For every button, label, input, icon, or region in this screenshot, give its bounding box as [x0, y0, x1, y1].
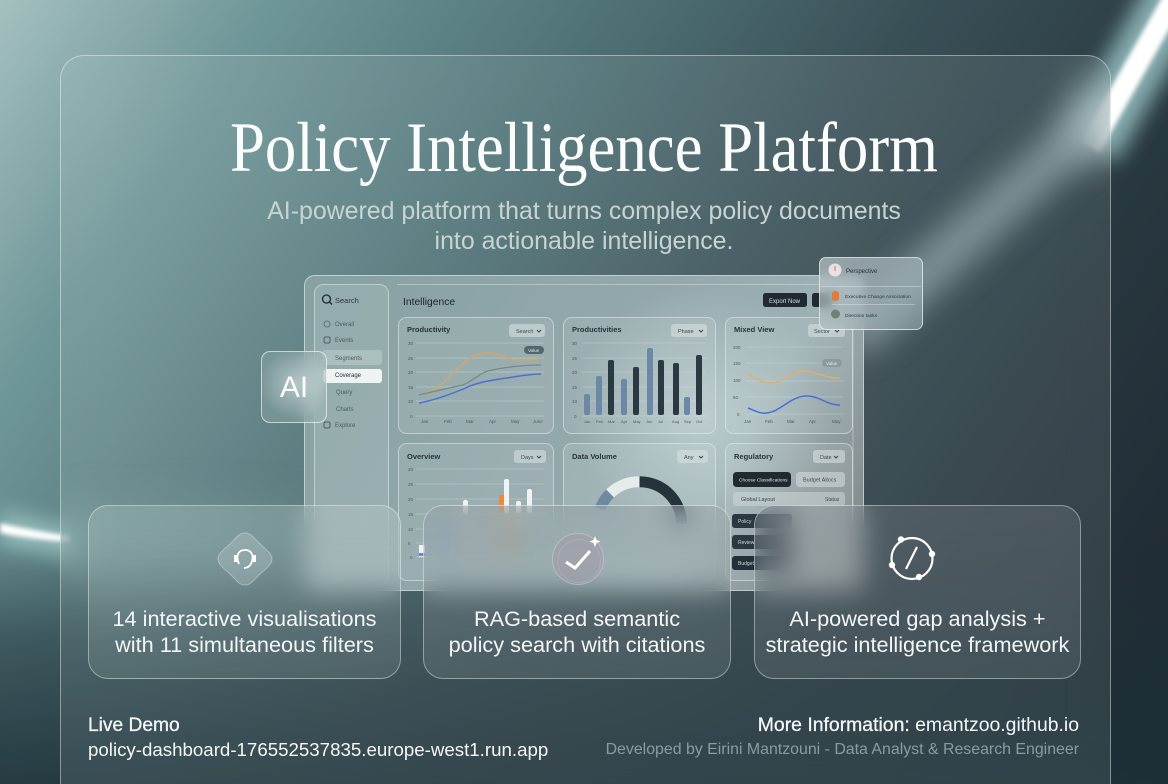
line chart card: productivity: 25	[408, 356, 414, 361]
line chart card: productivity: Search	[516, 329, 533, 335]
footer: live demo: Live Demo	[88, 714, 180, 736]
line chart card: mixed view: Value	[826, 361, 838, 366]
bar chart card: productivity bars: 15	[572, 385, 578, 390]
feature text: with 11 simultaneous filters	[115, 632, 374, 657]
dashboard sidebar: Explore	[335, 423, 356, 429]
line chart card: productivity: Productivity	[407, 325, 451, 334]
line chart card: productivity: Feb	[444, 419, 452, 424]
AI floating tile: AI	[280, 371, 308, 404]
icon: headset diamond	[218, 532, 272, 586]
bar chart card: productivity bars: 20	[572, 370, 578, 375]
controls card: Status	[825, 497, 840, 503]
line chart card: productivity	[398, 318, 554, 434]
bar chart card: overview: Overview	[407, 452, 441, 461]
footer: developer credit: Developed by Eirini Mantzouni - Data Analyst & Research Engineer	[606, 741, 1079, 758]
bar chart card: overview: 10	[408, 527, 414, 532]
bar chart card: productivity bars: May	[633, 419, 641, 424]
feature text: AI-powered gap analysis +	[789, 606, 1046, 631]
dashboard sidebar	[314, 284, 388, 584]
controls card: Budget	[738, 561, 754, 567]
line chart card: mixed view: May	[832, 419, 841, 424]
bar chart card: productivity bars: Jun	[646, 419, 652, 424]
bar chart card: overview	[398, 444, 554, 580]
donut chart card	[564, 444, 716, 580]
bar chart card: productivity bars: Oct	[696, 419, 703, 424]
AI floating tile	[261, 351, 327, 423]
dashboard sidebar: Charts	[336, 407, 354, 413]
controls card	[726, 444, 852, 580]
line chart card: mixed view: Feb	[765, 419, 773, 424]
bar chart card: overview: 0	[410, 555, 413, 560]
line chart card: productivity: Apr	[489, 419, 497, 424]
feature card: gap analysis	[754, 505, 1081, 679]
line chart card: mixed view	[726, 318, 852, 434]
dashboard sidebar: Search	[335, 296, 359, 305]
bar chart card: productivity bars: 10	[572, 399, 578, 404]
bar chart card: productivity bars: Productivities	[572, 325, 622, 334]
line chart card: mixed view: Sector	[814, 329, 830, 335]
feature card: semantic search	[423, 505, 731, 679]
floating notification popup: Executive Change Association	[845, 294, 911, 300]
bar chart card: overview: 30	[408, 467, 414, 472]
donut chart card: Data Volume	[572, 452, 617, 461]
controls card: Global Layout	[741, 497, 775, 503]
line chart card: mixed view: Mar	[787, 419, 795, 424]
dashboard sidebar: Query	[336, 390, 352, 396]
feature text	[766, 606, 1070, 657]
subtitle	[267, 196, 901, 254]
dashboard sidebar: Coverage	[335, 373, 362, 379]
bar chart card: productivity bars: Aug	[672, 419, 679, 424]
line chart card: mixed view: Jan	[744, 419, 752, 424]
line chart card: productivity: 20	[408, 370, 414, 375]
line chart card: productivity: June	[533, 419, 543, 424]
feature text: strategic intelligence framework	[766, 632, 1069, 657]
bar chart card: overview: 20	[408, 497, 414, 502]
bar chart card: productivity bars: Sep	[684, 419, 692, 424]
bar chart card: productivity bars: 0	[574, 414, 577, 419]
bar chart card: productivity bars: 25	[572, 356, 578, 361]
subtitle: AI-powered platform that turns complex policy documents	[267, 196, 901, 224]
bar chart card: productivity bars: Jan	[584, 419, 590, 424]
line chart card: productivity: Value	[528, 348, 540, 353]
icon: check badge	[552, 533, 604, 585]
dashboard sidebar: Events	[335, 338, 353, 344]
bar chart card: productivity bars: Apr	[621, 419, 628, 424]
feature card: visualisations	[88, 505, 401, 679]
bar chart card: productivity bars: Jul	[658, 419, 663, 424]
feature text: policy search with citations	[449, 632, 705, 657]
bar chart card: productivity bars: Mar	[608, 419, 616, 424]
bar chart card: productivity bars	[564, 318, 716, 434]
line chart card: mixed view: Mixed View	[734, 325, 774, 334]
dashboard heading: Intelligence	[403, 297, 455, 308]
footer: live demo: policy-dashboard-176552537835.europe-west1.run.app	[88, 739, 548, 760]
line chart card: mixed view: 50	[733, 395, 739, 400]
icon: circular gap analysis	[888, 536, 936, 580]
panel diagonal glow	[70, 79, 1109, 582]
controls card: Budget Allocs	[803, 478, 837, 484]
controls card: Review	[738, 540, 755, 546]
bar chart card: productivity bars: Phase	[678, 329, 694, 335]
line chart card: mixed view: 0	[737, 412, 740, 417]
dashboard action buttons	[763, 293, 832, 307]
line chart card: productivity: May	[511, 419, 520, 424]
controls card: Regulatory	[734, 452, 774, 461]
dashboard action buttons: Export Now	[769, 299, 801, 305]
line chart card: mixed view: 200	[733, 345, 741, 350]
floating notification popup: Perspective	[846, 269, 878, 275]
line chart card: mixed view: 150	[733, 361, 741, 366]
feature text	[449, 606, 705, 657]
bar chart card: overview: Days	[521, 455, 534, 461]
footer: live demo	[88, 714, 548, 760]
dashboard sidebar: Overall	[335, 322, 354, 328]
dashboard sidebar: Segments	[335, 356, 362, 362]
footer: more information: More Information: emantzoo.github.io	[758, 714, 1079, 736]
donut chart card: Any	[684, 455, 694, 461]
feature text: 14 interactive visualisations	[112, 606, 376, 631]
floating notification popup	[819, 257, 923, 330]
bar chart card: productivity bars: Feb	[596, 419, 604, 424]
line chart card: mixed view: 100	[733, 378, 741, 383]
controls card: Date	[820, 455, 832, 461]
bar chart card: overview: 15	[408, 512, 414, 517]
line chart card: productivity: 10	[408, 399, 414, 404]
controls card: Choose Classifications	[739, 478, 788, 484]
feature text: RAG-based semantic	[474, 606, 680, 631]
line chart card: productivity: Mar	[466, 419, 474, 424]
line chart card: productivity: Jan	[421, 419, 429, 424]
line chart card: mixed view: Apr	[809, 419, 817, 424]
controls card: Policy	[738, 519, 752, 525]
title: Policy Intelligence Platform	[230, 108, 938, 187]
bar chart card: overview: 5	[408, 541, 411, 546]
bar chart card: overview: 25	[408, 482, 414, 487]
line chart card: productivity: 0	[410, 414, 413, 419]
bar chart card: productivity bars: 30	[572, 341, 578, 346]
subtitle: into actionable intelligence.	[435, 226, 733, 254]
feature text	[112, 606, 376, 657]
floating notification popup: Direction tasks	[845, 313, 878, 319]
line chart card: productivity: 15	[408, 385, 414, 390]
line chart card: productivity: 30	[408, 341, 414, 346]
